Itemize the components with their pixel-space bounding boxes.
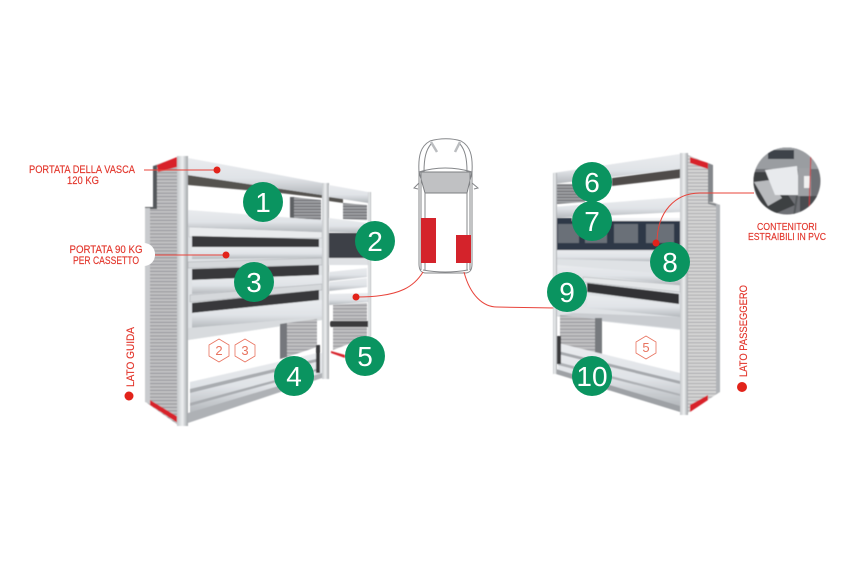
label: lato passeggero: LATO PASSEGGERO: [738, 285, 750, 377]
callout: portata della vasca: [29, 164, 220, 187]
left thin post right unit: [553, 173, 557, 374]
left shelving unit: lato guida: [145, 156, 329, 426]
connector line: inset to bins: [657, 193, 754, 243]
inset photo: pull-out PVC containers: [753, 147, 822, 216]
number badge 4: 4: [286, 361, 302, 392]
van roof window: [419, 172, 472, 193]
middle post: [322, 183, 329, 379]
second beam: [188, 210, 322, 232]
left shelving unit: narrow section: [329, 185, 371, 358]
number badge 9: [547, 272, 587, 312]
second beam right: [553, 197, 680, 218]
callout: portata della vasca: 120 KG: [67, 175, 99, 187]
callout: contenitori estraibili: ESTRAIBILI IN PVC: [748, 231, 826, 243]
callout: portata per cassetto: PER CASSETTO: [73, 255, 139, 267]
right side slatted panel: [688, 155, 720, 413]
left side slatted panel: [145, 157, 178, 425]
number badge 2: 2: [367, 226, 383, 257]
main front post right: [680, 153, 688, 415]
number badge 3: [234, 262, 274, 302]
top dark shelf: [188, 175, 322, 198]
drawer block right: [553, 250, 680, 330]
number badge 8: [650, 242, 690, 282]
number badge 9: 9: [559, 277, 575, 308]
white tab behind cassetto label: [100, 243, 155, 266]
hexagon icon: 2: [209, 339, 229, 362]
van rear cargo left: [421, 218, 436, 263]
number badge 6: [572, 162, 612, 202]
callout: contenitori estraibili: CONTENITORI: [757, 221, 817, 233]
top beam: [188, 158, 322, 195]
number badge 5: [345, 336, 385, 376]
back slatted panel upper right: [557, 184, 585, 204]
lower back slatted panel: [287, 319, 317, 357]
number badge 6: 6: [584, 167, 600, 198]
number badge 1: [243, 182, 283, 222]
lower back slatted panel right: [560, 315, 595, 362]
top beam right: [553, 154, 680, 184]
hexagon icon: 3: [235, 339, 255, 362]
bins: [555, 218, 680, 250]
number badge 3: 3: [246, 267, 262, 298]
number badge 5: 5: [357, 341, 373, 372]
van top view: [414, 139, 478, 273]
connector line: van to right unit: [464, 272, 555, 308]
connector line: van to left unit: [357, 272, 423, 297]
number badge 4: [274, 356, 314, 396]
number badge 8: 8: [662, 247, 678, 278]
number badge 1: 1: [255, 187, 271, 218]
number badge 7: [572, 201, 612, 241]
number badge 10: 10: [576, 361, 608, 392]
hexagon icon: 3: 3: [241, 343, 249, 358]
hexagon icon: 2: 2: [215, 343, 223, 358]
label: lato guida: LATO GUIDA: [125, 326, 137, 387]
back slatted panel upper: [292, 197, 321, 220]
callout: portata per cassetto: PORTATA 90 KG: [70, 244, 142, 256]
top dark shelf right: [612, 169, 680, 186]
hexagon icon: 5: 5: [642, 340, 650, 355]
bottom drawer: [188, 345, 322, 423]
number badge 10: [572, 356, 612, 396]
main front post: [177, 156, 188, 426]
callout: contenitori estraibili: [748, 221, 826, 243]
bottom drawer right: [556, 336, 680, 412]
connector dot: bins: [652, 240, 660, 246]
number badge 2: [355, 221, 395, 261]
hexagon icon: 5: [636, 336, 656, 359]
connector dot: left drawer: [352, 294, 360, 300]
drawer block: [188, 227, 322, 340]
number badge 7: 7: [584, 206, 600, 237]
callout: portata della vasca: PORTATA DELLA VASCA: [29, 164, 136, 176]
right shelving unit: lato passeggero: [553, 153, 720, 415]
callout: portata per cassetto: [70, 244, 230, 267]
